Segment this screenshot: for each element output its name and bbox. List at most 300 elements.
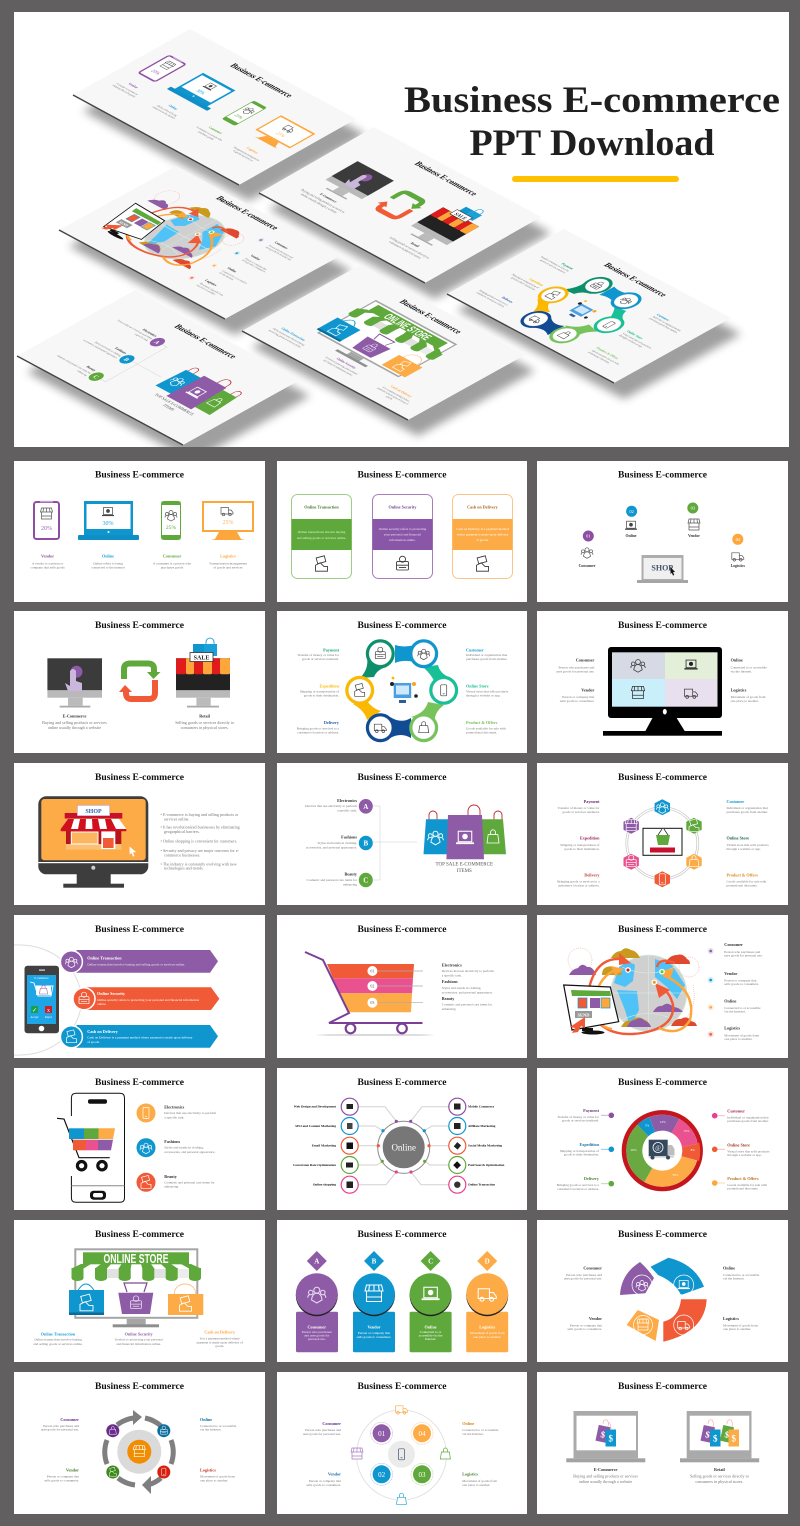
left labels xyxy=(297,648,340,734)
labels: Logistics xyxy=(462,1472,478,1477)
labels right: promotional discounts. xyxy=(727,1187,759,1191)
item consumer: Consumer xyxy=(579,564,596,568)
labels right: Customer xyxy=(727,1108,745,1114)
labels: Vendor xyxy=(724,971,738,976)
arrow heads xyxy=(611,953,674,998)
slide title: Business E-commerce xyxy=(95,1229,185,1240)
labels xyxy=(31,554,247,570)
labels right: through a website or app. xyxy=(727,1153,762,1157)
item vendor: 03 xyxy=(691,506,696,511)
card online transaction: Online Transaction xyxy=(304,504,339,510)
right labels xyxy=(466,648,509,734)
left labels: Conversion Rate Optimization xyxy=(293,1163,336,1167)
column logistics: Movement of goods from xyxy=(470,1331,505,1335)
left labels: Online shopping xyxy=(313,1182,336,1186)
phone: Reject xyxy=(45,1016,52,1019)
layer markers: 01 xyxy=(370,968,374,974)
labels: A vendor is a person or xyxy=(32,562,64,566)
labels: sells goods to consumers. xyxy=(724,982,759,986)
labels: Person or company that xyxy=(562,695,594,699)
slide title: Business E-commerce xyxy=(618,924,708,935)
cart xyxy=(305,952,434,1036)
panel: hero xyxy=(14,12,789,461)
hub dots xyxy=(377,1120,431,1174)
hexagons xyxy=(624,799,702,887)
labels: Fashions xyxy=(341,834,357,840)
labels: Person or company that xyxy=(47,1475,79,1479)
labels: via the Internet. xyxy=(731,670,752,674)
card online security xyxy=(372,494,432,578)
slide title: Business E-commerce xyxy=(618,1229,708,1240)
panel: slide 8 top sale items bags xyxy=(277,763,527,905)
item online: Online xyxy=(626,534,637,538)
labels: Person who purchases and xyxy=(559,666,595,670)
labels: Selling goods or services directly to xyxy=(175,720,234,725)
arrow online transaction: Online Transaction xyxy=(87,956,122,960)
badge C xyxy=(359,873,373,887)
labels: Logistics xyxy=(220,554,236,558)
bullet list: services online. xyxy=(164,816,189,821)
labels: Logistics xyxy=(200,1468,216,1472)
labels: Online xyxy=(200,1417,212,1422)
labels: enhancing xyxy=(164,1185,179,1189)
ring product and offers xyxy=(409,713,438,742)
labels: Selling goods or services directly to xyxy=(690,1474,749,1479)
labels: Person who purchases and xyxy=(305,1428,341,1432)
hero mockup: ring slide xyxy=(447,229,741,399)
labels: promotional discounts. xyxy=(726,884,758,888)
labels left: Bringing goods or services to a xyxy=(557,1183,599,1187)
labels: Buying and selling products or services xyxy=(42,720,107,725)
slide title: Business E-commerce xyxy=(95,620,185,631)
slide title: Business E-commerce xyxy=(95,924,185,935)
labels: Consumer xyxy=(322,1421,341,1426)
labels: Connected to or accessible xyxy=(200,1424,237,1428)
labels: Devices that use electricity to perform xyxy=(305,804,357,808)
labels: one place to another. xyxy=(200,1478,228,1482)
labels: one place to another. xyxy=(724,1037,753,1041)
icon electronics xyxy=(136,1104,156,1122)
labels: A consumer is a person who xyxy=(153,562,191,566)
monitor with shop awning: SALE xyxy=(194,656,209,662)
right labels: Product & Offers xyxy=(466,720,498,725)
laptop retail: $ xyxy=(713,1434,718,1444)
center store icon xyxy=(390,677,418,703)
slide title: Business E-commerce xyxy=(95,772,185,783)
labels: Buying and selling products or services xyxy=(573,1474,638,1479)
labels: accessories, and personal appearance. xyxy=(164,1150,216,1155)
labels: via the Internet. xyxy=(724,1010,746,1014)
right icon column xyxy=(449,1098,466,1193)
labels: Retail xyxy=(714,1467,726,1472)
labels: via the Internet. xyxy=(723,1276,745,1280)
labels: Transportation management xyxy=(209,562,247,566)
item online: 02 xyxy=(629,509,634,514)
bullet list: • The industry is constantly evolving with new xyxy=(160,861,237,866)
labels left xyxy=(557,1108,600,1191)
labels left: Shipping or transportation of xyxy=(560,1149,600,1153)
labels: via the Internet. xyxy=(462,1432,484,1436)
laptop e-commerce: $ xyxy=(600,1429,607,1440)
bullet list: • It has revolutionized businesses by eliminating xyxy=(160,825,240,830)
arrow online security: Online security refers to protecting your personal and financial information xyxy=(97,998,199,1002)
legend markers xyxy=(708,948,714,1037)
labels: sells goods to consumers. xyxy=(560,699,595,703)
laptop retail: $ xyxy=(731,1434,736,1444)
labels: Movement of goods from xyxy=(200,1475,235,1479)
truck icon xyxy=(649,1140,674,1160)
labels: E-Commerce xyxy=(63,714,86,718)
labels: Beauty xyxy=(164,1174,178,1179)
left labels: Bringing goods or services to a xyxy=(297,726,339,730)
panel: slide 21 laptops with price tags xyxy=(537,1372,788,1514)
circle 03 xyxy=(411,1463,433,1485)
right labels: Online Store xyxy=(466,684,489,688)
labels: Product & Offers xyxy=(726,872,758,877)
location dots xyxy=(626,968,664,984)
segment vendor xyxy=(627,1310,659,1341)
arrow cash on delivery: of goods. xyxy=(87,1040,100,1044)
labels: Retail xyxy=(199,714,211,718)
arrow cash on delivery: Cash on Delivery is a payment method where payment is made upon delivery xyxy=(87,1036,193,1040)
phone consumer: 25% xyxy=(166,525,176,531)
labels: customer's location or address. xyxy=(558,884,600,888)
arrow online transaction: Online transactions involve buying and selling goods or services online. xyxy=(87,962,185,966)
labels xyxy=(303,1421,499,1487)
panel: slide 14 online hub diagram xyxy=(277,1068,527,1210)
labels: uses goods for personal use. xyxy=(724,954,763,958)
card online security: your personal and financial xyxy=(384,532,421,536)
labels xyxy=(41,1417,237,1482)
labels xyxy=(442,962,494,1011)
labels left: Expedition xyxy=(579,1142,600,1147)
labels xyxy=(305,798,358,886)
blue bag xyxy=(69,1284,104,1315)
labels right: Product & Offers xyxy=(727,1176,759,1181)
globe xyxy=(611,955,687,1031)
labels: Online xyxy=(723,1266,735,1270)
phone: Accept xyxy=(31,1016,39,1019)
left labels: SEO and Content Marketing xyxy=(295,1124,336,1128)
labels: Movement of goods from xyxy=(462,1479,497,1483)
column consumer: personal use. xyxy=(308,1337,326,1341)
labels: Connected to or accessible xyxy=(723,1273,760,1277)
labels: a specific task. xyxy=(442,974,462,978)
slide title: Business E-commerce xyxy=(618,1077,708,1088)
orange bag xyxy=(168,1284,203,1315)
labels: via the Internet. xyxy=(200,1428,222,1432)
ring expedition xyxy=(345,676,374,705)
column online xyxy=(410,1251,452,1352)
card online security: Online Security xyxy=(388,504,417,510)
labels: payment is made upon delivery of xyxy=(197,1340,244,1344)
icon fashions xyxy=(136,1138,156,1157)
ring xyxy=(626,807,699,880)
badge C: C xyxy=(363,877,368,885)
card cash on delivery: where payment is made upon delivery xyxy=(457,532,509,536)
left labels: Email Marketing xyxy=(312,1144,336,1148)
card cash on delivery xyxy=(452,494,512,578)
labels: Online xyxy=(102,554,114,558)
slide title: Business E-commerce xyxy=(358,1381,447,1392)
panel: slide 5 six ring cycle xyxy=(277,611,527,753)
labels: Movement of goods from xyxy=(731,695,766,699)
column logistics: one place to another. xyxy=(473,1335,501,1339)
labels: uses goods for personal use. xyxy=(303,1432,341,1436)
hero mockup: shopping bags slide xyxy=(16,320,312,447)
slide title: Business E-commerce xyxy=(95,1077,185,1088)
hero mockup: e-commerce and retail slide xyxy=(259,127,551,299)
ring delivery xyxy=(366,713,395,742)
ring online store xyxy=(429,676,458,705)
laptop shop xyxy=(637,555,688,583)
labels: Devices that use electricity to perform xyxy=(164,1111,217,1115)
layer markers: 03 xyxy=(370,1000,374,1005)
column online: Connected to or xyxy=(420,1330,442,1334)
markers right xyxy=(712,1113,725,1186)
labels: Online xyxy=(462,1421,474,1426)
labels: Person or company that xyxy=(724,979,756,983)
badge B xyxy=(359,836,373,850)
item logistics: Logistics xyxy=(731,564,745,568)
labels: Styles and trends in clothing, xyxy=(164,1146,204,1151)
item consumer: 01 xyxy=(586,534,590,539)
monitor xyxy=(38,796,148,888)
column vendor: sells goods to consumers. xyxy=(357,1335,391,1339)
labels left: goods or services rendered. xyxy=(562,1118,599,1122)
labels: Transfer of money or value for xyxy=(558,806,600,810)
panel: slide 2 transaction security delivery cards xyxy=(277,461,527,602)
labels: Vendor xyxy=(41,554,54,558)
labels: uses goods for personal use. xyxy=(564,1276,602,1280)
segment consumer xyxy=(620,1262,654,1295)
labels: through a website or app. xyxy=(726,847,761,851)
truck icon: @ xyxy=(655,1146,661,1152)
circle 01: 01 xyxy=(378,1430,386,1438)
panel: slide 10 phone with arrows xyxy=(14,915,265,1058)
labels: and selling goods or services online. xyxy=(33,1342,83,1346)
title underline xyxy=(512,176,679,182)
column logistics: Logistics xyxy=(479,1324,495,1329)
right labels: through a website or app. xyxy=(466,694,501,698)
hero title: PPT Download xyxy=(470,123,715,164)
labels: Vendor xyxy=(581,688,595,692)
labels: Payment xyxy=(584,799,600,804)
bullet list: • E-commerce is buying and selling products or xyxy=(160,812,239,817)
labels left: Transfer of money or value for xyxy=(557,1115,600,1119)
laptop retail: $ xyxy=(724,1429,731,1440)
labels right: Individual or organization that xyxy=(727,1116,769,1120)
connector lines xyxy=(373,806,417,880)
slide title: Business E-commerce xyxy=(358,1229,447,1240)
column online: C xyxy=(428,1258,433,1266)
badge A xyxy=(359,799,373,814)
labels: Beauty xyxy=(442,996,455,1001)
labels: Movement of goods from xyxy=(723,1324,758,1328)
panel: slide 3 numbered items and laptop xyxy=(537,461,788,602)
labels: Cosmetic and personal care items for xyxy=(442,1002,493,1006)
labels: Person or company that xyxy=(309,1479,341,1483)
left icon column xyxy=(341,1098,358,1193)
circle 02 xyxy=(371,1463,393,1485)
labels: consumers in physical stores. xyxy=(181,725,229,730)
slide title: Business E-commerce xyxy=(358,924,447,935)
labels: company that sells goods xyxy=(31,566,65,570)
awning xyxy=(72,1264,201,1281)
labels left: Payment xyxy=(583,1108,600,1113)
labels: Connected to or accessible xyxy=(731,666,767,670)
shop illustration xyxy=(61,805,136,856)
labels: Styles and trends in clothing, xyxy=(318,841,357,846)
card cash on delivery: of goods. xyxy=(476,538,489,542)
clouds xyxy=(569,948,697,1027)
slide title: Business E-commerce xyxy=(618,620,708,631)
left labels: Web Design and Development xyxy=(294,1104,337,1108)
column consumer: A xyxy=(314,1258,319,1266)
labels: Consumer xyxy=(163,554,181,558)
item online xyxy=(625,506,637,538)
right labels: promotional discounts. xyxy=(466,730,497,734)
labels: Connected to or accessible xyxy=(462,1428,499,1432)
column consumer: Consumer xyxy=(307,1324,326,1329)
labels: Vendor xyxy=(66,1468,79,1472)
icon beauty xyxy=(136,1173,156,1192)
labels: Electronics xyxy=(337,798,357,803)
column online: Online xyxy=(425,1324,437,1329)
labels left: customer's location or address. xyxy=(557,1187,599,1191)
labels: Individual or organization that xyxy=(726,806,768,810)
labels: goods to their destination. xyxy=(564,847,600,851)
bags caption: ITEMS xyxy=(457,869,472,874)
monitor with shop awning xyxy=(176,638,230,708)
circle 04: 04 xyxy=(418,1430,426,1438)
phone xyxy=(24,966,59,1033)
labels: and financial information online. xyxy=(116,1342,161,1346)
labels left: goods to their destination. xyxy=(564,1153,599,1157)
circle 02: 02 xyxy=(378,1471,386,1479)
labels: Online Security xyxy=(125,1332,154,1336)
panel: slide 19 arrow cycle xyxy=(14,1372,265,1514)
laptop retail xyxy=(680,1411,759,1462)
arrow cash on delivery: Cash on Delivery xyxy=(87,1029,119,1034)
left labels: goods to their destination. xyxy=(304,694,339,698)
right labels: Paid Search Optimization xyxy=(468,1163,505,1167)
shop illustration: SHOP xyxy=(85,809,102,815)
hero title: Business E-commerce xyxy=(404,80,780,121)
labels: one place to another. xyxy=(462,1483,490,1487)
labels xyxy=(556,658,767,703)
item vendor: Vendor xyxy=(688,534,700,538)
labels right: purchases goods from another. xyxy=(727,1119,769,1123)
segment online xyxy=(650,1258,704,1295)
column vendor xyxy=(353,1251,395,1352)
labels: one place to another. xyxy=(723,1327,751,1331)
laptop online: 30% xyxy=(102,521,114,527)
badge B: B xyxy=(363,840,368,848)
red arc arrows xyxy=(587,959,675,1034)
arrow head red xyxy=(119,685,132,692)
panel: slide 6 monitor quadrants xyxy=(537,611,788,753)
labels: a specific task. xyxy=(337,808,357,812)
hero mockup: device percentages slide xyxy=(72,55,366,205)
labels: Online xyxy=(731,658,743,662)
labels: Electronics xyxy=(442,962,462,968)
outer ring xyxy=(356,1410,446,1500)
labels: Online refers to being xyxy=(93,562,123,566)
labels xyxy=(573,1467,749,1484)
labels xyxy=(724,942,763,1041)
donut: 15% xyxy=(683,1129,690,1133)
left labels xyxy=(293,1104,337,1186)
circle 03: 03 xyxy=(418,1471,426,1479)
tablet vendor: 20% xyxy=(41,526,52,532)
badge A: A xyxy=(363,803,368,811)
labels: of goods and services xyxy=(213,566,243,570)
panel: slide 1 vendor online consumer logistics xyxy=(14,461,265,602)
donut: 20% xyxy=(631,1148,637,1152)
labels: Fashions xyxy=(442,979,458,984)
labels: Virtual store that sells products xyxy=(726,843,769,847)
labels: Fashions xyxy=(164,1139,180,1144)
labels: Delivery xyxy=(584,872,600,877)
left labels: Shipping or transportation of xyxy=(300,690,340,694)
labels: Electronics xyxy=(164,1104,185,1110)
card cash on delivery: Cash on Delivery is a payment method xyxy=(456,527,509,531)
labels: connected to the internet xyxy=(91,566,125,570)
labels right xyxy=(727,1108,770,1191)
column vendor: Vendor xyxy=(367,1324,381,1329)
phone: ✓ xyxy=(32,1008,37,1014)
labels: Consumer xyxy=(60,1417,79,1422)
column online: accessible via the xyxy=(419,1334,443,1338)
labels: a specific task. xyxy=(164,1115,185,1119)
labels: Person or company that xyxy=(570,1324,602,1328)
labels: Logistics xyxy=(731,688,747,692)
column logistics xyxy=(466,1251,508,1352)
panel: slide 16 online store xyxy=(14,1220,265,1362)
bullet list: commerce businesses. xyxy=(164,852,200,857)
slide title: Business E-commerce xyxy=(358,1077,447,1088)
ring icons xyxy=(351,1403,451,1505)
left labels: Payment xyxy=(323,648,340,652)
right labels: Individual or organization that xyxy=(466,653,507,657)
labels: E-Commerce xyxy=(594,1467,618,1472)
monitor with touch finger xyxy=(47,658,102,708)
labels right: Goods available for sale with xyxy=(727,1183,767,1187)
labels xyxy=(557,799,769,888)
right labels: Affiliate Marketing xyxy=(468,1124,496,1128)
panel: slide 15 donut chart xyxy=(537,1068,788,1210)
arrow online transaction xyxy=(60,950,218,973)
left labels: Delivery xyxy=(324,720,340,725)
labels: uses goods for personal use. xyxy=(41,1428,79,1432)
slide title: Business E-commerce xyxy=(358,772,447,783)
arrow online security xyxy=(73,987,219,1010)
donut xyxy=(624,1112,701,1189)
column online: Internet. xyxy=(425,1337,436,1341)
slide title: Business E-commerce xyxy=(358,620,447,631)
bullet list: • Security and privacy are major concerns for e- xyxy=(160,848,240,853)
column vendor: B xyxy=(372,1258,377,1266)
cycle arrow heads xyxy=(133,1410,151,1494)
labels: Logistics xyxy=(724,1026,740,1031)
item consumer xyxy=(579,530,596,568)
markers left xyxy=(601,1112,614,1186)
card online transaction: Online transactions involve buying xyxy=(298,530,346,534)
labels: online usually through a website xyxy=(48,725,101,730)
circle 01 xyxy=(371,1422,393,1444)
labels right: Virtual store that sells products xyxy=(727,1150,770,1154)
